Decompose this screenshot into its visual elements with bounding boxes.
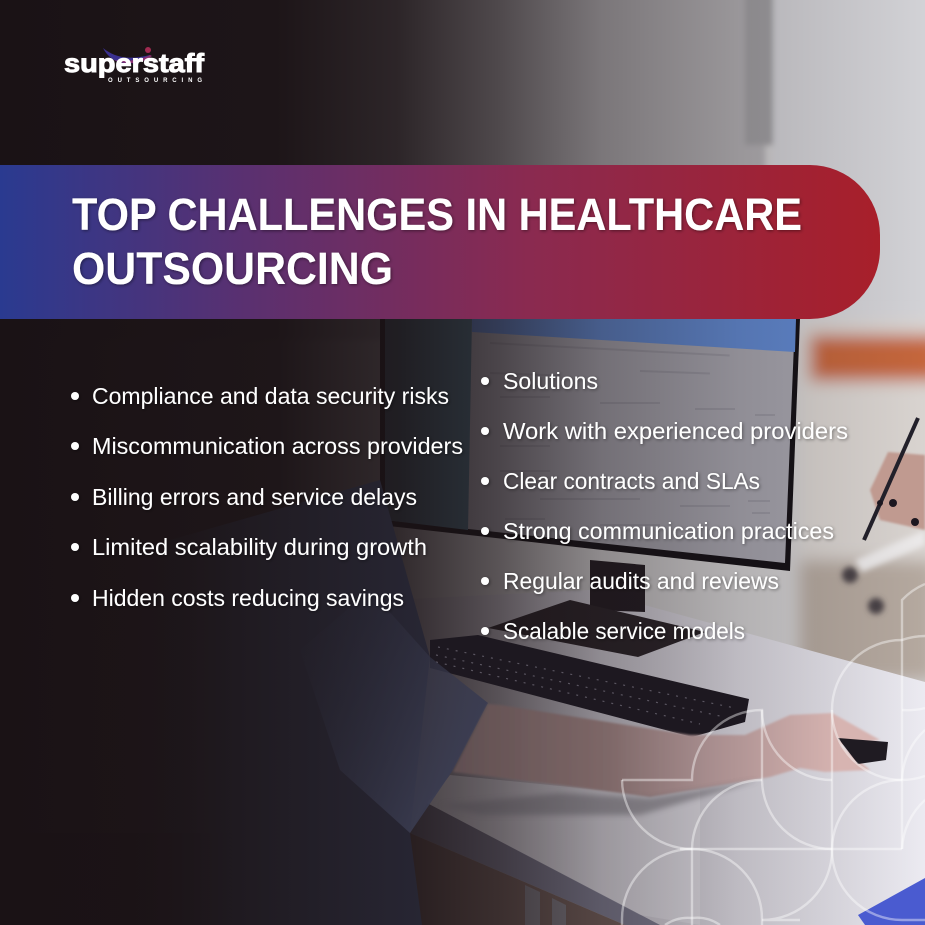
challenge item 1: Compliance and data security risks [92, 383, 449, 409]
screen table rows [490, 342, 775, 526]
desk highlight, left section [427, 775, 700, 925]
challenge item 2: Miscommunication across providers [92, 433, 463, 459]
logo subtitle: OUTSOURCING [108, 78, 202, 84]
solution item 6: Scalable service models [503, 618, 745, 644]
monitor screen [385, 319, 795, 563]
arm shadow [440, 780, 760, 815]
monitor base [488, 600, 705, 657]
title: TOP CHALLENGES IN HEALTHCARE [72, 189, 802, 240]
desk front edge [410, 803, 660, 925]
person's torso [100, 480, 430, 925]
solution item 4: Strong communication practices [503, 518, 834, 544]
title: OUTSOURCING [72, 243, 393, 294]
blurred chair wheels [842, 530, 925, 614]
blue object [858, 878, 925, 925]
solutions list [481, 368, 848, 644]
screen sidebar [385, 319, 472, 530]
keyboard [430, 635, 749, 737]
forearm and hand [440, 704, 888, 815]
challenges list [71, 383, 463, 611]
logo wordmark: superstaff [64, 48, 204, 78]
person's sleeve [300, 590, 488, 833]
solution item 5: Regular audits and reviews [503, 568, 779, 594]
logo swoosh [103, 48, 150, 63]
logo [64, 47, 204, 84]
solution item 1: Solutions [503, 368, 598, 394]
floor below desk [0, 833, 625, 925]
decorative line pattern [622, 584, 925, 925]
logo dot [145, 47, 151, 53]
challenge item 3: Billing errors and service delays [92, 484, 417, 510]
solution item 2: Work with experienced providers [503, 418, 848, 444]
challenge item 4: Limited scalability during growth [92, 534, 427, 560]
challenge item 5: Hidden costs reducing savings [92, 585, 404, 611]
monitor stand [590, 560, 645, 612]
monitor bezel [380, 319, 800, 571]
title banner [0, 165, 880, 319]
solution item 3: Clear contracts and SLAs [503, 468, 760, 494]
mouse [838, 738, 888, 764]
screen header [472, 319, 796, 352]
desk [390, 590, 925, 925]
hand holding pen [864, 418, 925, 540]
wall panels [0, 0, 925, 340]
